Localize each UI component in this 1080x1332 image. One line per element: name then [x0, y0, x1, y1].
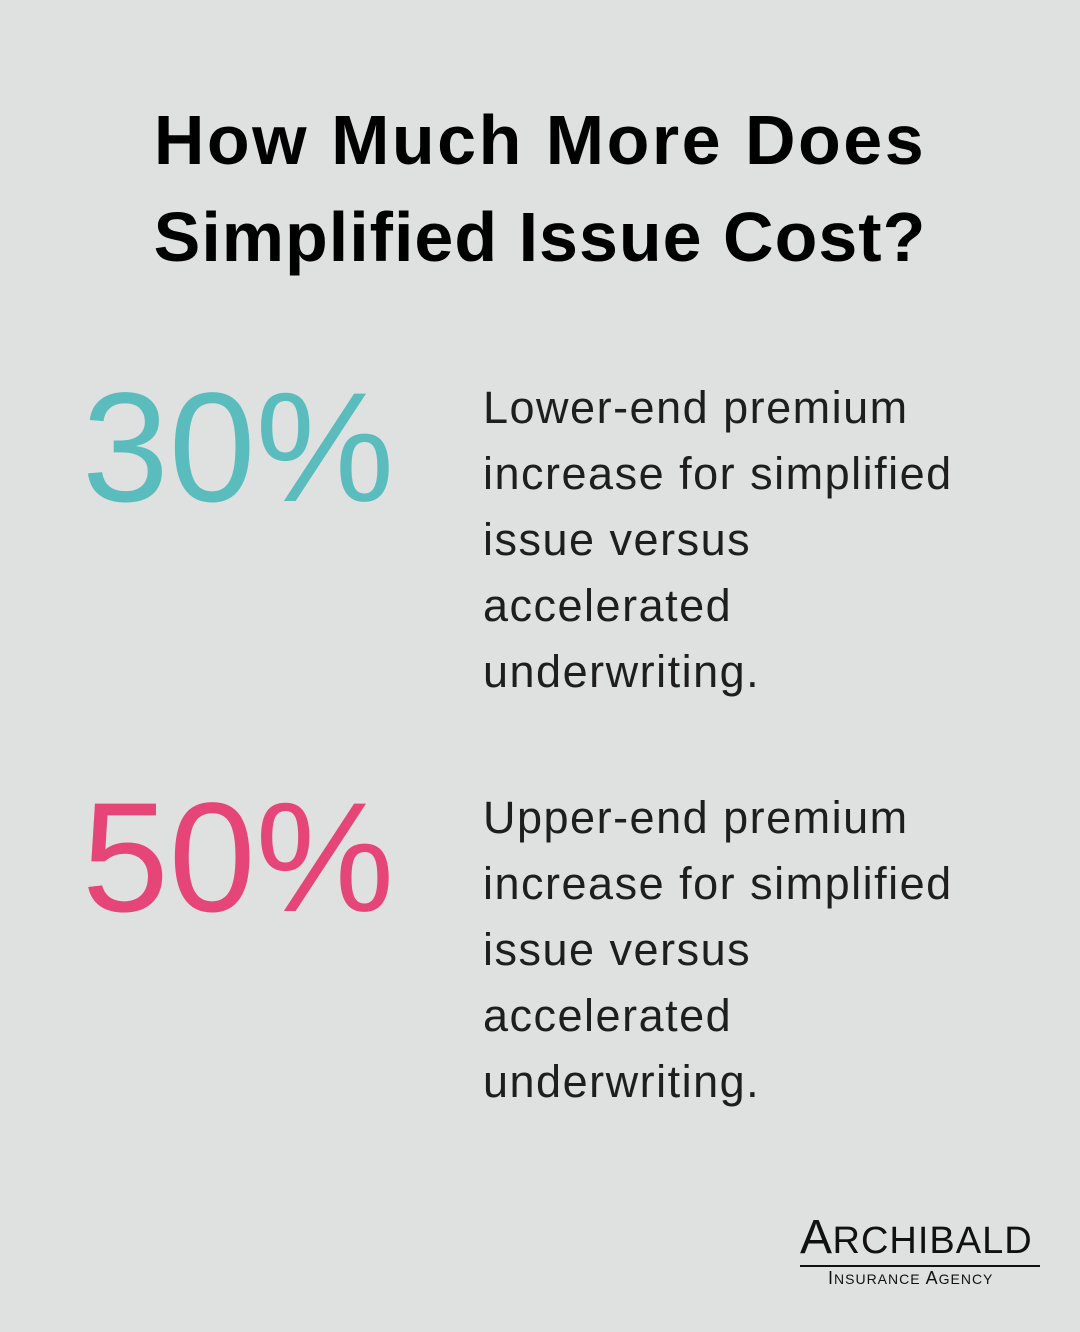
text: 30% description: issue versus	[483, 514, 751, 565]
text: 30% description: underwriting.	[483, 646, 760, 697]
text: 50% description: underwriting.	[483, 1056, 760, 1107]
text: 50% description: Upper-end premium	[483, 792, 909, 843]
logo	[800, 1211, 1040, 1288]
text: 50% description: issue versus	[483, 924, 751, 975]
text: 50% description: increase for simplified	[483, 858, 953, 909]
title	[154, 101, 926, 276]
text: 50% description	[483, 792, 953, 1107]
text: 30% description: accelerated	[483, 580, 732, 631]
title: How Much More Does	[154, 101, 926, 179]
stat: 30%: 30%	[82, 361, 394, 535]
title: Simplified Issue Cost?	[154, 198, 926, 276]
stat: 50%: 50%	[82, 771, 394, 945]
text: 30% description: increase for simplified	[483, 448, 953, 499]
text: 30% description: Lower-end premium	[483, 382, 909, 433]
text: 50% description: accelerated	[483, 990, 732, 1041]
logo: INSURANCE AGENCY	[828, 1268, 993, 1288]
text: 30% description	[483, 382, 953, 697]
logo: ARCHIBALD	[800, 1211, 1033, 1264]
